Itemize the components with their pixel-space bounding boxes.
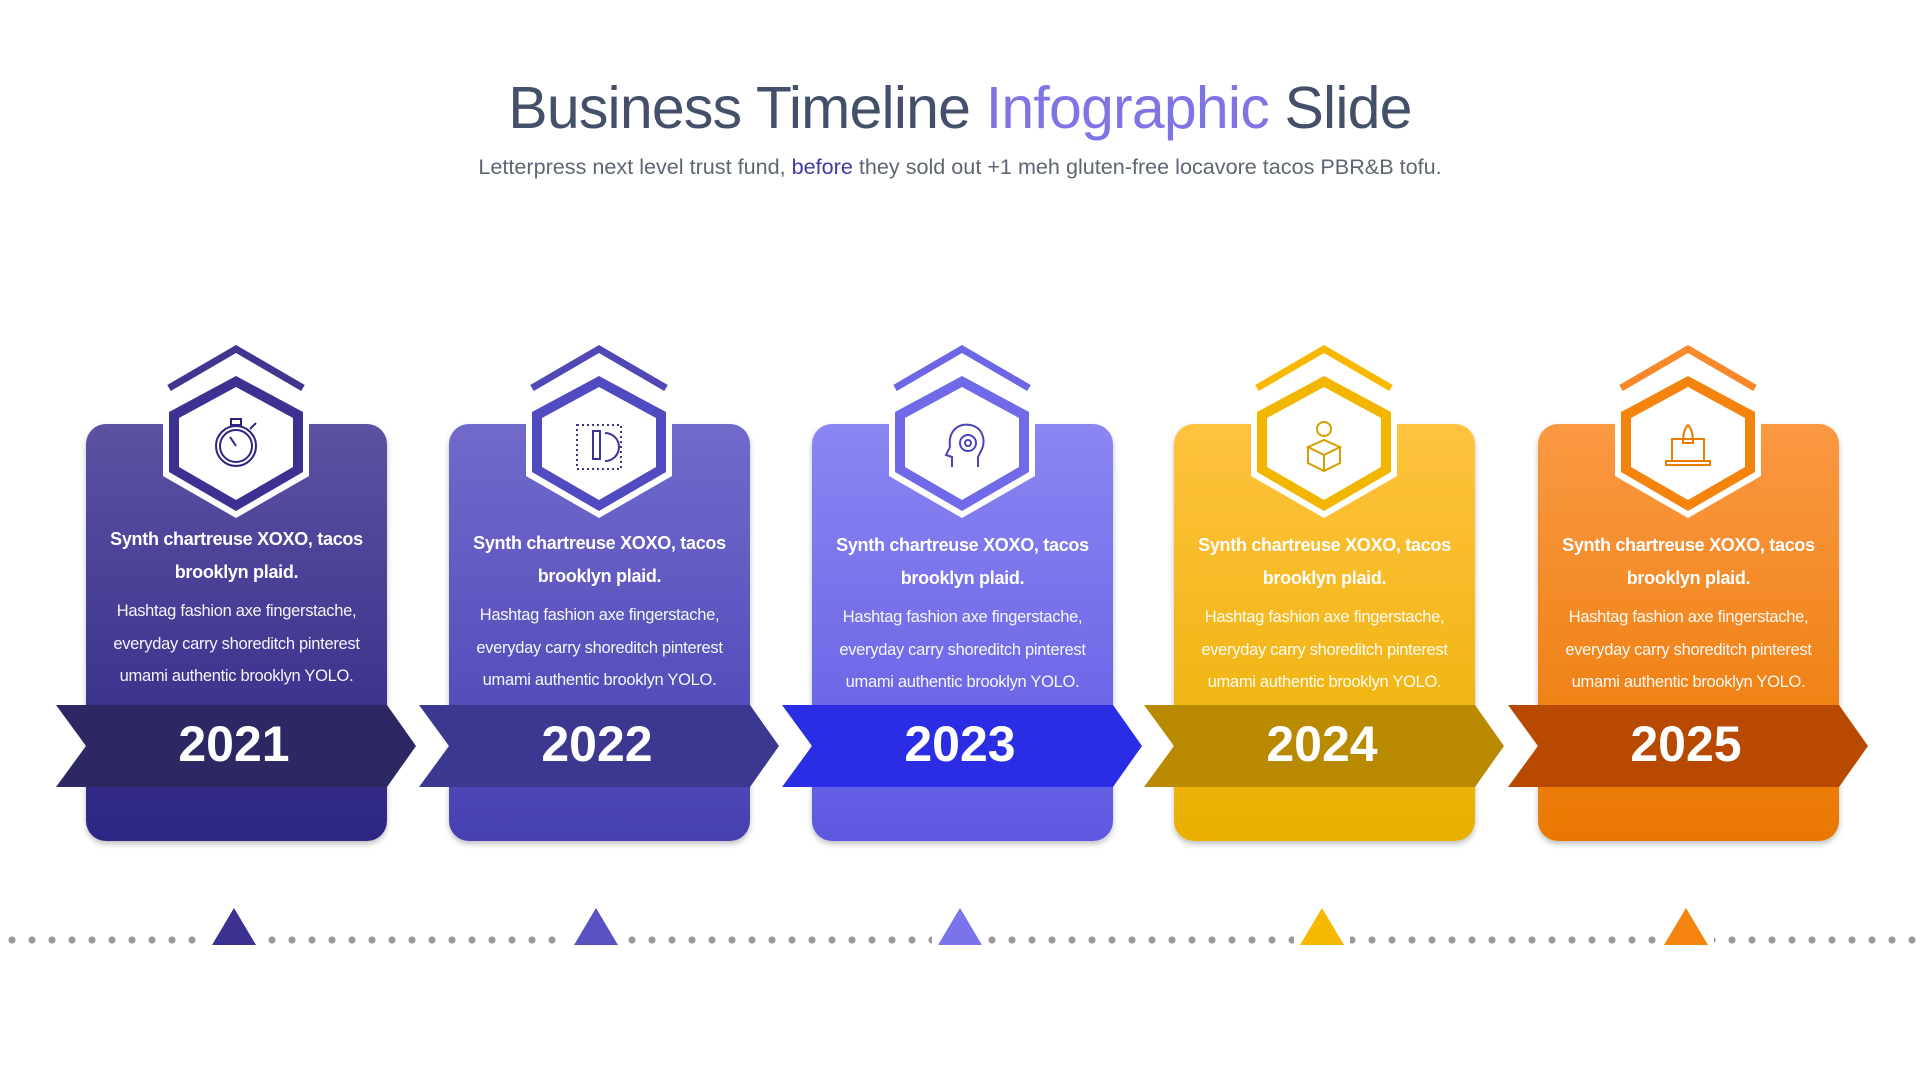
card 2024 xyxy=(1144,345,1504,847)
card 2021 xyxy=(56,345,416,847)
card 2022: 2022 xyxy=(541,716,653,772)
card 2024: Synth chartreuse XOXO, tacos brooklyn plaid. xyxy=(1198,535,1451,588)
card 2022: Synth chartreuse XOXO, tacos brooklyn plaid. xyxy=(473,533,726,586)
card 2023: Synth chartreuse XOXO, tacos brooklyn plaid. xyxy=(836,535,1089,588)
card 2025 xyxy=(1508,345,1868,847)
card 2022 xyxy=(419,345,779,847)
card 2021: Hashtag fashion axe fingerstache, everyday carry shoreditch pinterest umami authentic brooklyn YOLO. xyxy=(113,602,360,685)
card 2021: Synth chartreuse XOXO, tacos brooklyn plaid. xyxy=(110,529,363,582)
subtitle: Letterpress next level trust fund, before they sold out +1 meh gluten-free locavore tacos PBR&B tofu. xyxy=(478,154,1442,179)
card 2021: 2021 xyxy=(178,716,290,772)
card 2025: Synth chartreuse XOXO, tacos brooklyn plaid. xyxy=(1562,535,1815,588)
card 2023 xyxy=(782,345,1142,847)
card 2023: 2023 xyxy=(904,716,1016,772)
timeline axis with triangle markers xyxy=(8,908,1916,945)
title: Business Timeline Infographic Slide xyxy=(508,75,1412,141)
card 2025: Hashtag fashion axe fingerstache, everyday carry shoreditch pinterest umami authentic brooklyn YOLO. xyxy=(1565,608,1812,691)
card 2022: Hashtag fashion axe fingerstache, everyday carry shoreditch pinterest umami authentic brooklyn YOLO. xyxy=(476,606,723,689)
card 2023: Hashtag fashion axe fingerstache, everyday carry shoreditch pinterest umami authentic brooklyn YOLO. xyxy=(839,608,1086,691)
card 2024: 2024 xyxy=(1266,716,1378,772)
card 2024: Hashtag fashion axe fingerstache, everyday carry shoreditch pinterest umami authentic brooklyn YOLO. xyxy=(1201,608,1448,691)
card 2025: 2025 xyxy=(1630,716,1742,772)
